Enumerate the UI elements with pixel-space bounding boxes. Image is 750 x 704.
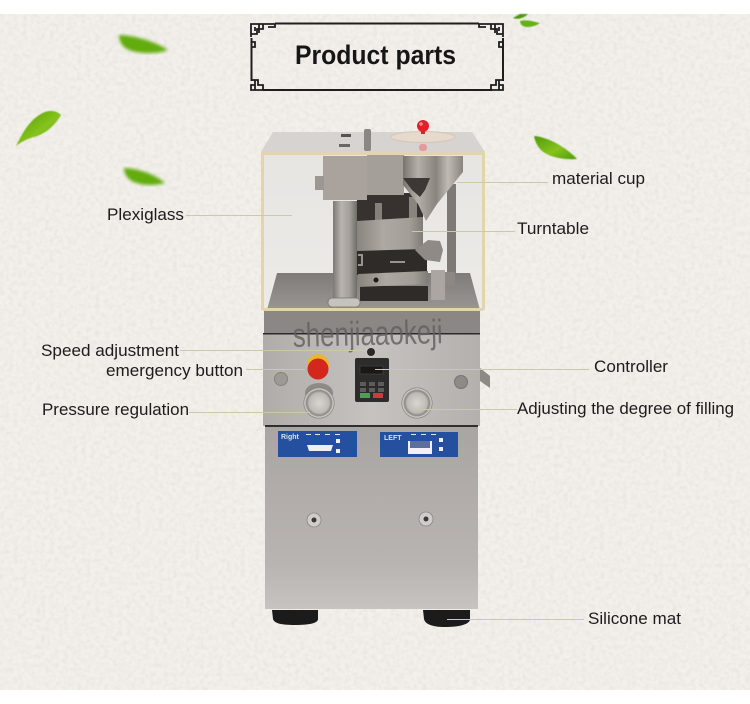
label: Speed adjustment: Speed adjustment (41, 341, 179, 360)
rubber feet (272, 610, 470, 627)
filling knob (402, 388, 432, 418)
label: material cup: material cup (552, 169, 645, 188)
dark mechanism (357, 193, 428, 301)
head block (315, 155, 404, 200)
icon: blurred leaf top left (119, 35, 168, 53)
label: Plexiglass: Plexiglass (107, 205, 184, 224)
title: Product parts (295, 40, 456, 70)
label: Controller: Controller (594, 357, 668, 376)
blue label left: LEFT (384, 435, 402, 442)
blue label left (380, 432, 458, 457)
watermark: shenjiaaokeji (292, 313, 443, 355)
machine (261, 120, 490, 627)
top black knob (366, 348, 376, 356)
icon: leaf top right (513, 14, 540, 27)
controller (355, 358, 389, 402)
icon: blurred leaf lower left (124, 168, 165, 185)
label: emergency button: emergency button (106, 361, 243, 380)
label: Silicone mat: Silicone mat (588, 609, 681, 628)
leader lines (180, 182, 589, 620)
blue label right: Right (281, 434, 300, 441)
lower cabinet (265, 427, 478, 609)
rod (447, 184, 456, 274)
column (328, 201, 360, 307)
control panel (263, 333, 480, 427)
label: Turntable: Turntable (517, 219, 589, 238)
pressure knob (304, 383, 334, 418)
side indicators (274, 368, 490, 388)
icon: leaf right (534, 136, 577, 159)
lid ring and knob (339, 120, 455, 151)
screws (307, 512, 433, 527)
label: Pressure regulation: Pressure regulation (42, 400, 189, 419)
turntable (357, 217, 423, 251)
emergency button (307, 354, 329, 380)
hopper throat (403, 178, 430, 197)
material cup hopper (403, 156, 463, 221)
icon: leaf left (16, 111, 61, 146)
top dark strip (264, 311, 480, 333)
adjuster fittings (415, 240, 455, 300)
blue label right (278, 431, 357, 457)
label: Adjusting the degree of filling: Adjusting the degree of filling (517, 399, 734, 418)
lower ring (358, 271, 428, 287)
title frame (251, 24, 503, 90)
plexiglass cover (261, 132, 485, 311)
